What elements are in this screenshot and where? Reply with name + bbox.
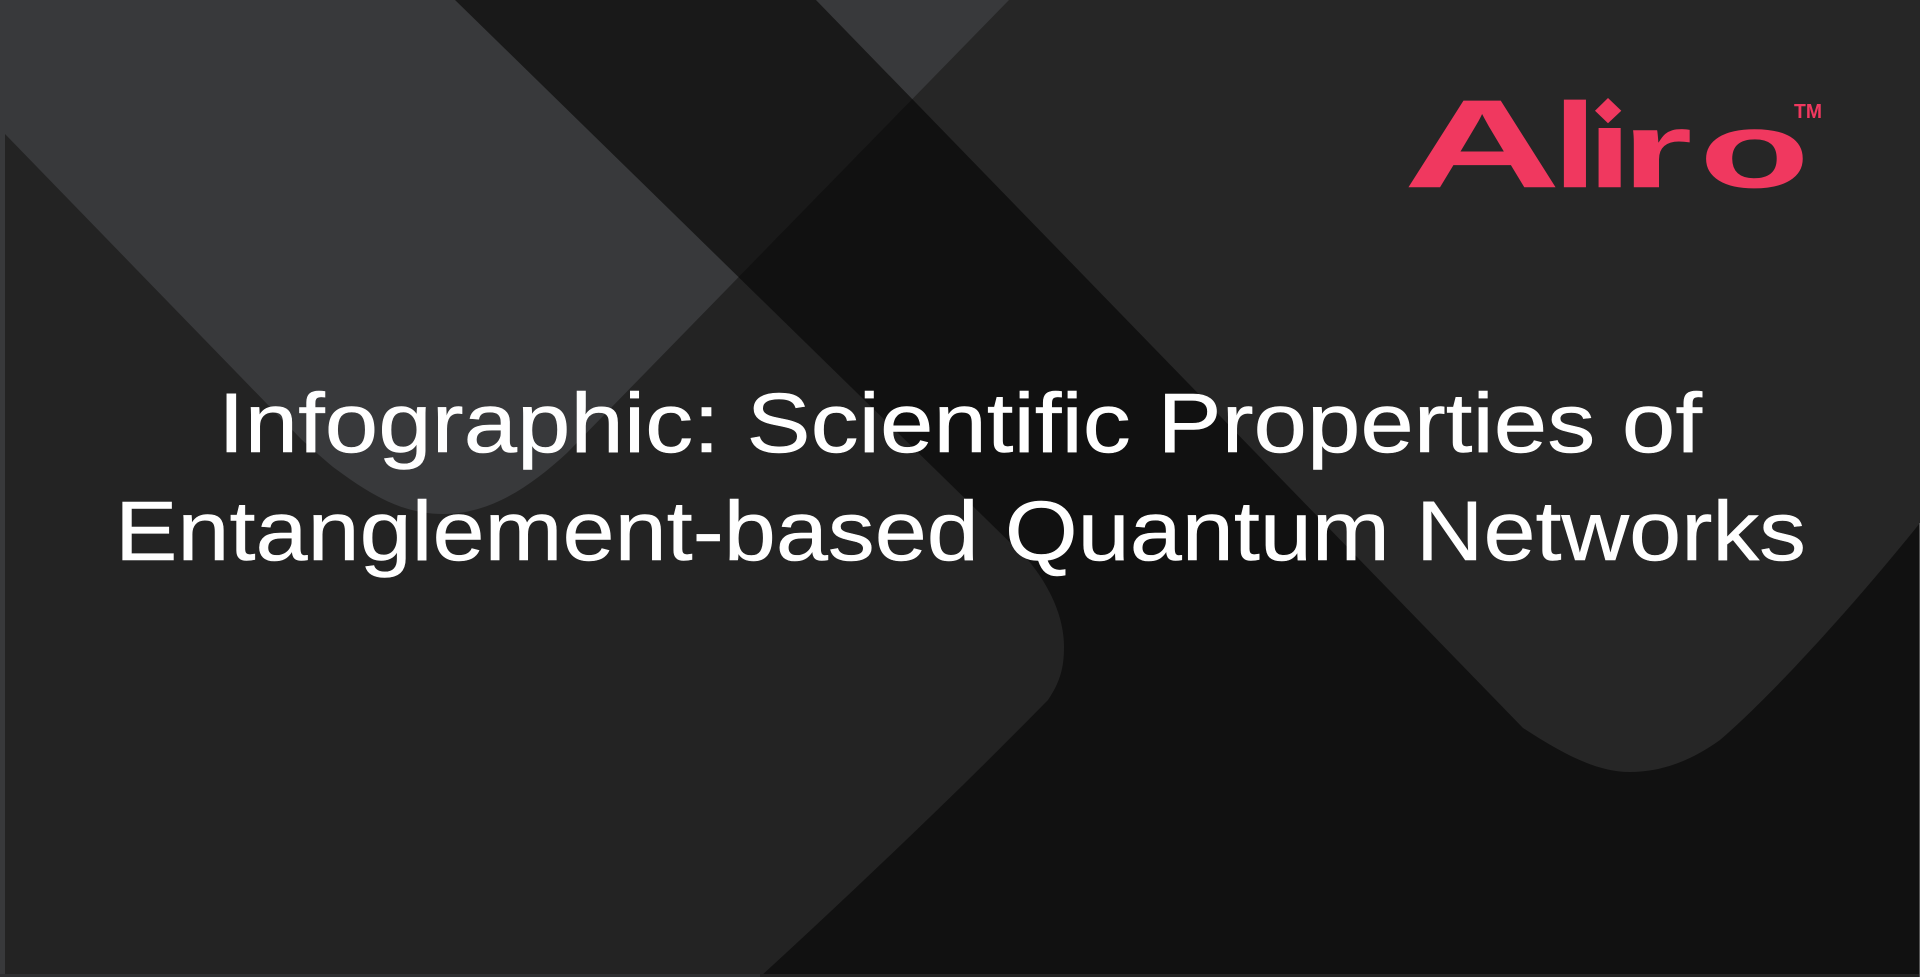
title: [115, 376, 1806, 578]
background shape: lower-left rounded panel: [0, 0, 1064, 977]
logo letter o: o: [1699, 90, 1810, 210]
logo letters l and i: li: [1553, 79, 1632, 214]
logo: Aliro: [1403, 73, 1822, 214]
logo diamond dot: [1595, 98, 1621, 123]
logo letter A: A: [1403, 73, 1561, 214]
title line 2: Entanglement-based Quantum Networks: [115, 484, 1806, 578]
logo letter r: r: [1621, 90, 1692, 210]
title line 1: Infographic: Scientific Properties of: [218, 376, 1703, 470]
background shape: upper-left chevron: [0, 0, 1009, 514]
logo trademark: TM: [1794, 101, 1822, 123]
background overlap: chevron over upper-right chevron: [816, 0, 1009, 99]
logo i-dot cover: [1594, 92, 1622, 128]
background overlap: chevron over lower-left panel: [5, 0, 738, 514]
background shape: upper-right chevron: [816, 0, 1920, 772]
